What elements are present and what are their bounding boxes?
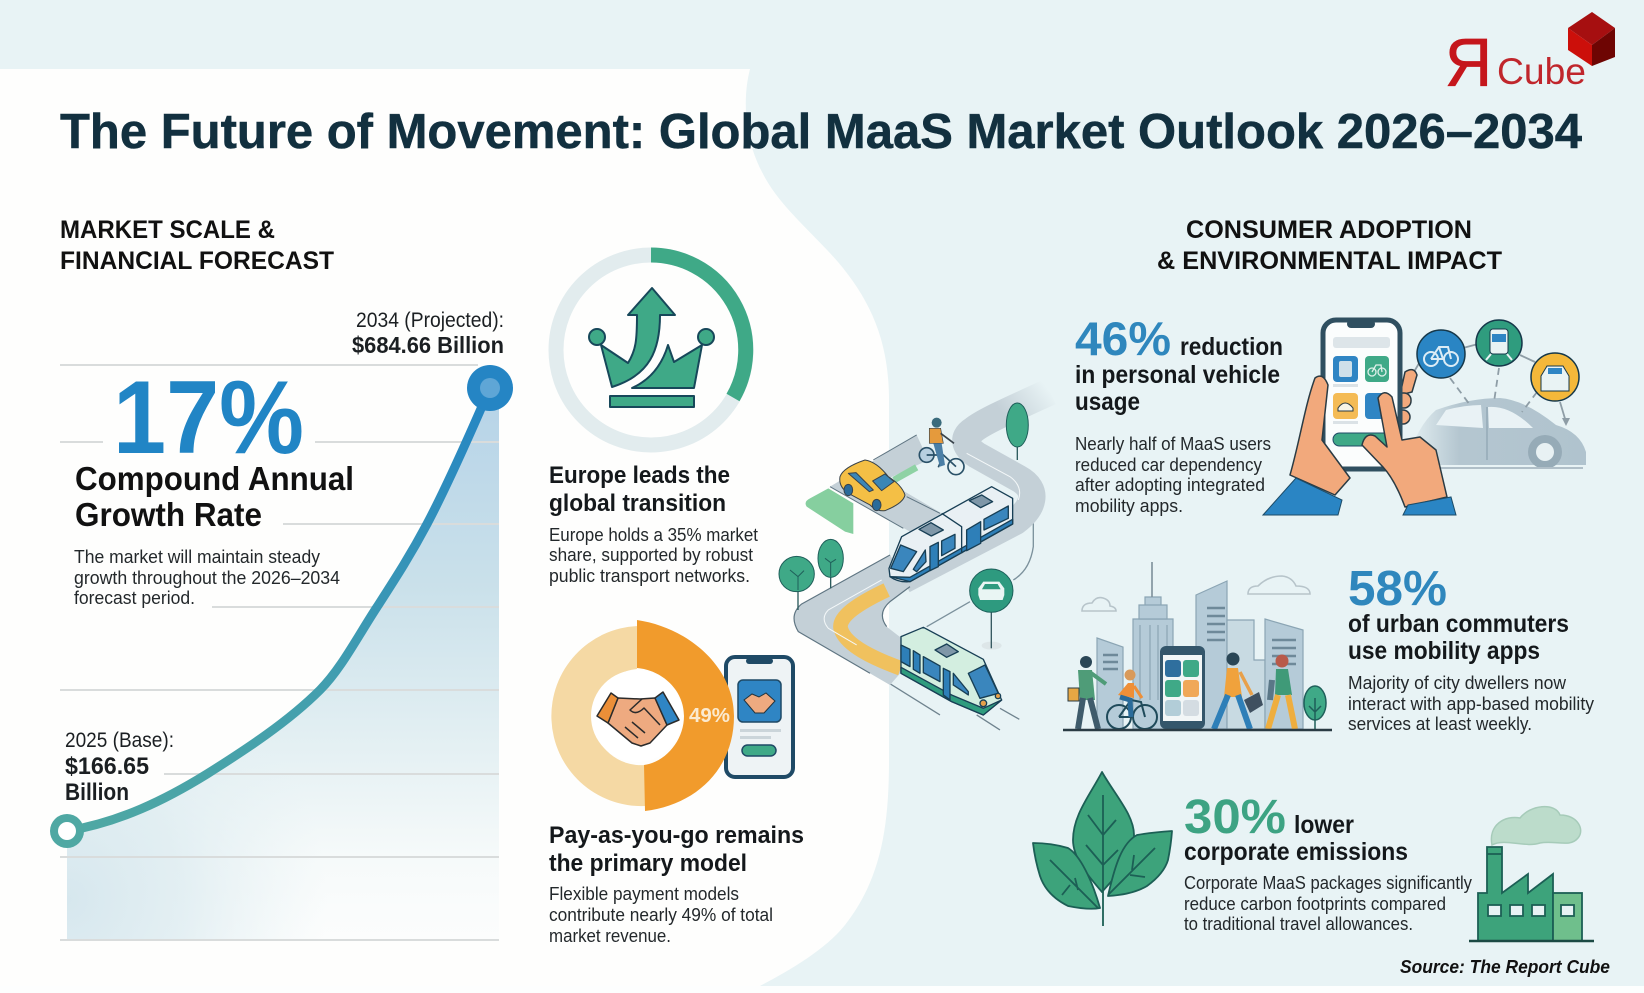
icon: payment phone <box>726 657 793 777</box>
stat: 17% CAGR: The market will maintain steady <box>74 546 321 567</box>
stat: 46%: in personal vehicle <box>1075 361 1280 389</box>
bus <box>901 627 1002 715</box>
cyclist <box>919 418 964 475</box>
illustration: city commuters <box>1063 562 1332 730</box>
text: Europe leads: public transport networks. <box>549 565 750 586</box>
grey car <box>1405 398 1586 469</box>
tram <box>889 487 1013 582</box>
stat: 30% <box>1184 791 1473 934</box>
text: pay-as-you-go: the primary model <box>549 850 747 877</box>
heading: market scale: FINANCIAL FORECAST <box>60 247 334 275</box>
source note: Source: The Report Cube <box>1400 957 1610 977</box>
heading: consumer adoption: CONSUMER ADOPTION <box>1186 216 1472 244</box>
logo: RCube <box>1445 12 1615 101</box>
text: pay-as-you-go: market revenue. <box>549 925 671 946</box>
stat: 46%: after adopting integrated <box>1075 474 1265 495</box>
tree <box>1304 686 1326 729</box>
label: 2034 projected: $684.66 Billion <box>352 332 504 358</box>
stat: 58%: services at least weekly. <box>1348 713 1532 734</box>
stat: 30%: lower <box>1294 811 1354 839</box>
sign: car <box>970 569 1013 650</box>
icon: car <box>1531 353 1579 401</box>
stat: 46%: reduced car dependency <box>1075 454 1263 475</box>
stat: 58%: Majority of city dwellers now <box>1348 672 1567 693</box>
stat: 46%: mobility apps. <box>1075 495 1183 516</box>
phone <box>1323 320 1400 469</box>
stat: 58%: of urban commuters <box>1348 610 1569 638</box>
icon: crown ring <box>556 255 746 445</box>
stat: 30%: corporate emissions <box>1184 838 1408 866</box>
chart: pay-as-you-go donut <box>551 620 793 811</box>
title: The Future of Movement: Global MaaS Market Outlook 2026–2034 <box>60 105 1582 159</box>
text: Europe leads <box>549 462 758 586</box>
tree <box>779 403 1028 610</box>
stat: 30%: Corporate MaaS packages significantly <box>1184 872 1473 893</box>
label: 2034 projected <box>352 309 504 358</box>
marker: 2034 <box>467 365 513 411</box>
text: Europe leads: Europe holds a 35% market <box>549 524 758 545</box>
text: pay-as-you-go: Pay-as-you-go remains <box>549 822 804 849</box>
commuter: woman <box>1268 654 1295 729</box>
text: Europe leads: global transition <box>549 490 726 517</box>
commuter: cyclist <box>1107 670 1157 729</box>
label: 2034 projected: 2034 (Projected): <box>356 309 504 332</box>
stat: 30%: reduce carbon footprints compared <box>1184 893 1446 914</box>
icon: leaves <box>1033 772 1172 926</box>
stat: 46%: usage <box>1075 388 1140 416</box>
sleeves <box>1263 478 1456 515</box>
icon: bike <box>1417 330 1465 378</box>
marker: 2025 <box>50 814 84 848</box>
icon: factory <box>1469 807 1594 941</box>
stat: 17% CAGR: forecast period. <box>74 587 195 608</box>
label: 2025 base <box>65 729 174 806</box>
icon: handshake <box>597 692 679 746</box>
left hand back <box>1396 370 1417 424</box>
chart: pay-as-you-go donut: 49% <box>689 705 730 727</box>
logo: RCube: Я <box>1445 25 1492 101</box>
commuter: walking with bag <box>1068 656 1106 729</box>
clouds <box>1082 576 1310 611</box>
heading: consumer adoption <box>1157 216 1502 275</box>
stat: 46% <box>1075 312 1283 516</box>
stat: 30%: to traditional travel allowances. <box>1184 913 1413 934</box>
road network <box>794 392 1050 730</box>
stat: 17% CAGR: 17% <box>113 360 304 476</box>
text: Europe leads: share, supported by robust <box>549 544 753 565</box>
stat: 58%: 58% <box>1348 562 1447 616</box>
text: pay-as-you-go: contribute nearly 49% of total <box>549 904 773 925</box>
chart: market growth curve <box>50 365 513 940</box>
stat: 58%: interact with app-based mobility <box>1348 693 1595 714</box>
yellow car <box>840 460 905 511</box>
stat: 17% CAGR: Compound Annual <box>75 460 354 497</box>
label: 2025 base: $166.65 <box>65 753 149 780</box>
stat: 17% CAGR: growth throughout the 2026–2034 <box>74 567 340 588</box>
phone <box>1160 646 1205 729</box>
connectors <box>1402 344 1570 426</box>
illustration: phone and car <box>1263 320 1586 515</box>
stat: 58% <box>1348 562 1595 734</box>
stat: 46%: Nearly half of MaaS users <box>1075 433 1271 454</box>
heading: market scale <box>60 216 334 275</box>
stat: 17% CAGR: Growth Rate <box>75 496 262 533</box>
illustration: multimodal road <box>779 392 1050 730</box>
label: 2025 base: Billion <box>65 779 129 806</box>
green plaza <box>806 467 917 534</box>
ground line <box>1063 729 1332 731</box>
stat: 17% CAGR <box>74 360 354 608</box>
heading: consumer adoption: & ENVIRONMENTAL IMPACT <box>1157 247 1502 275</box>
commuter: briefcase <box>1214 652 1263 729</box>
label: 2025 base: 2025 (Base): <box>65 729 174 752</box>
stat: 58%: use mobility apps <box>1348 637 1540 665</box>
text: pay-as-you-go <box>549 822 804 946</box>
stat: 46%: reduction <box>1180 333 1283 361</box>
text: Europe leads: Europe leads the <box>549 462 730 489</box>
stat: 30%: 30% <box>1184 791 1286 844</box>
hands <box>1290 376 1447 507</box>
heading: market scale: MARKET SCALE & <box>60 216 275 244</box>
buildings <box>1097 562 1303 729</box>
stat: 46%: 46% <box>1075 312 1171 365</box>
icon: train <box>1476 320 1522 366</box>
text: pay-as-you-go: Flexible payment models <box>549 883 739 904</box>
logo: RCube: Cube <box>1497 51 1586 92</box>
